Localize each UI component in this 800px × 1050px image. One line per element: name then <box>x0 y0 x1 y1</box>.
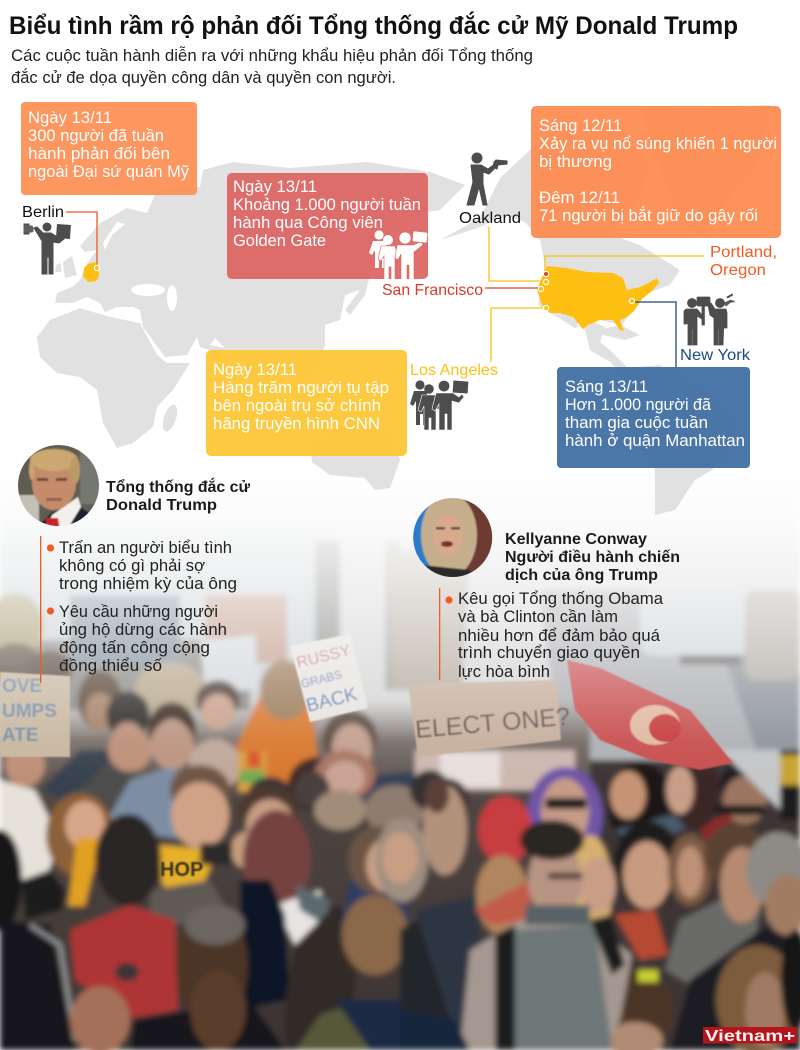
city labels: San Francisco <box>382 282 483 299</box>
panel: New York: hành ở quận Manhattan <box>565 432 745 450</box>
world map <box>37 105 770 515</box>
panel: San Francisco <box>227 173 428 280</box>
icon: white protesters <box>369 230 427 280</box>
panel: Los Angeles: hãng truyền hình CNN <box>213 415 380 433</box>
icon: Los Angeles protesters <box>410 380 468 430</box>
connector lines <box>66 212 704 370</box>
panel: Berlin: hành phản đối bên <box>28 145 170 163</box>
text block: Conway statements: Kêu gọi Tổng thống Obama <box>458 590 664 608</box>
city labels: Portland, <box>710 244 777 261</box>
text block: Conway statements: trình chuyển giao quyền <box>458 644 640 662</box>
panel: Oakland <box>531 106 781 238</box>
heading: Trump: Donald Trump <box>106 497 217 514</box>
text block: Trump statements <box>40 536 237 683</box>
panel: Oakland: Xảy ra vụ nổ súng khiến 1 người <box>539 135 777 153</box>
text block: Trump statements: đồng thiểu số <box>59 657 162 675</box>
signs in photo: RUSSY <box>295 642 353 672</box>
city labels: Oakland <box>459 210 521 227</box>
map highlight: USA <box>537 266 659 331</box>
text block: Trump statements: động tấn công cộng <box>59 639 210 657</box>
text block: Trump statements: ủng hộ dừng các hành <box>59 621 227 639</box>
signs in photo: ATE <box>2 725 39 746</box>
city labels: Los Angeles <box>410 362 498 379</box>
city labels: New York <box>680 347 751 364</box>
text block: Trump statements: không có gì phải sợ <box>59 557 205 575</box>
panel: Berlin: 300 người đã tuần <box>28 127 164 145</box>
signs in photo: GRABS <box>299 667 343 691</box>
signs in photo: HOP <box>160 859 203 881</box>
heading: Conway: Kellyanne Conway <box>505 531 647 548</box>
text block: Conway statements: lực hòa bình <box>458 663 550 681</box>
signs in photo: ELECT ONE? <box>414 703 571 744</box>
panel: Berlin <box>21 102 197 195</box>
panel: Berlin: ngoài Đại sứ quán Mỹ <box>28 163 190 181</box>
panel: New York: tham gia cuộc tuần <box>565 414 708 432</box>
panel: Los Angeles <box>206 350 407 456</box>
title: Biểu tình rầm rộ phản đối Tổng thống đắc cử Mỹ Donald Trump <box>9 10 738 40</box>
white fade over photo <box>0 450 800 780</box>
panel: Los Angeles: bên ngoài trụ sở chính <box>213 397 381 415</box>
intro text: Các cuộc tuần hành diễn ra với những khẩu hiệu phản đối Tổng thống <box>11 46 533 65</box>
heading: Trump: Tổng thống đắc cử <box>106 477 250 496</box>
text block: Conway statements: nhiều hơn để đảm bảo quá <box>458 627 661 645</box>
panel: Los Angeles: Hàng trăm người tụ tập <box>213 379 389 397</box>
text block: Trump statements: Yêu cầu những người <box>59 603 218 621</box>
portrait: Kellyanne Conway <box>413 498 492 577</box>
panel: San Francisco: hành qua Công viên <box>233 214 383 232</box>
text block: Conway statements: và bà Clinton cần làm <box>458 608 618 626</box>
panel: New York <box>557 367 750 468</box>
map highlight: Germany <box>83 262 99 282</box>
city labels: Oregon <box>710 262 766 279</box>
signs in photo: UMPS <box>2 701 57 722</box>
city markers <box>94 265 635 311</box>
icon: Berlin protester <box>24 223 70 274</box>
protest crowd photo <box>0 450 800 1050</box>
panel: New York: Hơn 1.000 người đã <box>565 396 712 414</box>
portrait: Donald Trump <box>18 445 99 526</box>
panel: Los Angeles: Ngày 13/11 <box>213 361 297 379</box>
intro text: đắc cử đe dọa quyền công dân và quyền con người. <box>11 68 396 87</box>
heading: Trump <box>106 477 250 514</box>
signs in photo: OVE <box>2 676 42 697</box>
heading: Conway: Người điều hành chiến <box>505 549 680 566</box>
icon: New York protesters <box>684 294 734 345</box>
panel: Oakland: Đêm 12/11 <box>539 189 620 207</box>
panel: Berlin: Ngày 13/11 <box>28 109 112 127</box>
panel: San Francisco: Ngày 13/11 <box>233 178 317 196</box>
heading: Conway <box>505 531 680 584</box>
panel: New York: Sáng 13/11 <box>565 378 648 396</box>
text block: Trump statements: trong nhiệm kỳ của ông <box>59 575 237 593</box>
signs in photo: BACK <box>304 684 360 717</box>
panel: Oakland: bị thương <box>539 153 612 171</box>
signs in photo <box>0 634 733 881</box>
panel: Oakland: Sáng 12/11 <box>539 117 622 135</box>
panel: San Francisco: Khoảng 1.000 người tuần <box>233 196 421 214</box>
text block: Trump statements: Trấn an người biểu tình <box>59 539 232 557</box>
text block: Conway statements <box>439 588 664 681</box>
city labels: Berlin <box>22 204 64 221</box>
panel: Oakland: 71 người bị bắt giữ do gây rối <box>539 206 758 225</box>
panel: San Francisco: Golden Gate <box>233 232 326 250</box>
logo: Vietnam+: Vietnam+ <box>705 1028 795 1045</box>
heading: Conway: dịch của ông Trump <box>505 567 658 584</box>
intro text <box>11 46 533 87</box>
city labels <box>22 204 777 379</box>
icon: Oakland gunman <box>467 153 507 205</box>
